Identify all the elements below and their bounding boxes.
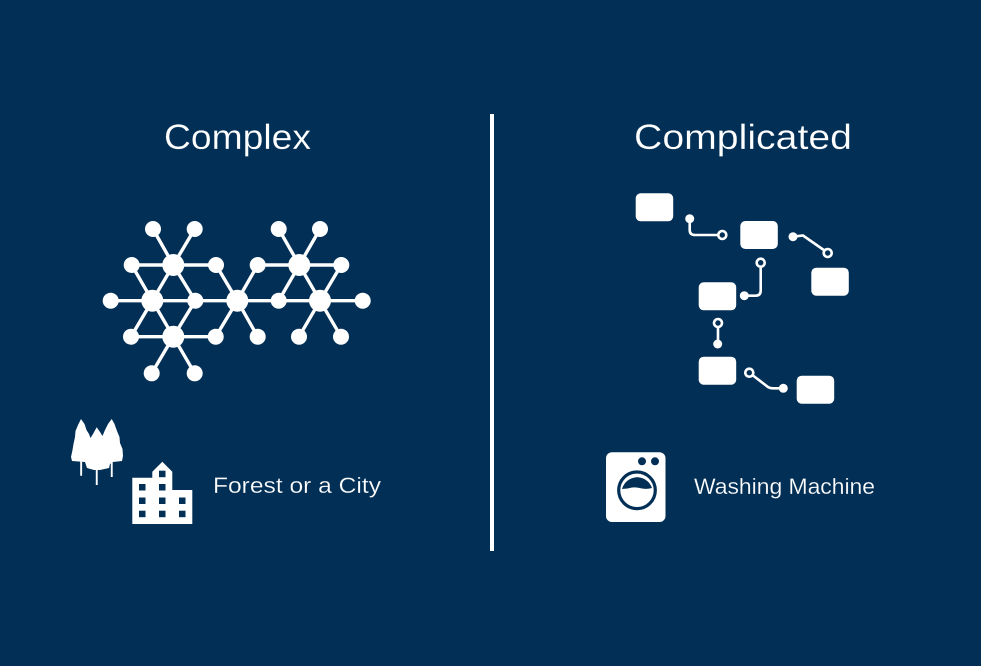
icon: building	[132, 462, 192, 524]
heading: Complex: Complex	[164, 118, 312, 157]
flow diagram: complicated	[636, 193, 849, 404]
network diagram: complex	[103, 221, 371, 381]
icon: washing machine	[606, 452, 666, 522]
heading: Complicated: Complicated	[634, 118, 852, 157]
label: Washing Machine: Washing Machine	[694, 474, 875, 499]
vertical divider	[490, 114, 494, 551]
icon: trees	[71, 419, 123, 485]
label: Forest or a City: Forest or a City	[213, 473, 381, 498]
